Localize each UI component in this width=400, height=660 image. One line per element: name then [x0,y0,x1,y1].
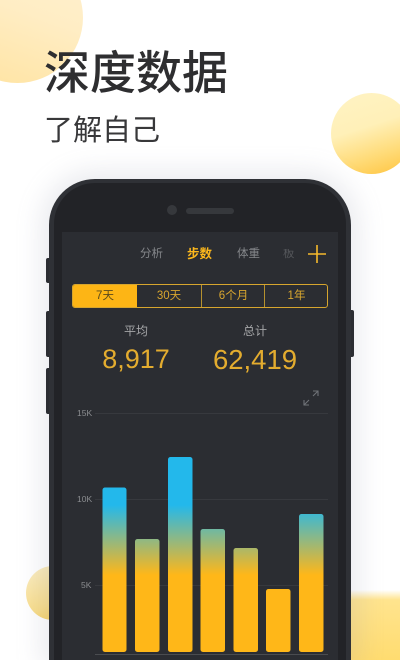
app screen [62,232,338,660]
nav tab: 步数 active: 步数 [187,247,212,261]
nav tab: 分析: 分析 [140,248,163,260]
stat value: total: 62,419 [213,344,297,375]
icon: plus [308,245,326,263]
bars [102,457,324,652]
phone front bezel [54,183,346,660]
speaker [186,208,234,214]
bar: day 1 [102,488,126,652]
stat label: 平均: 平均 [124,324,148,338]
stat value: average: 8,917 [102,344,170,374]
phone [46,179,354,660]
title: 深度数据 [44,47,228,99]
bar: day 7 [299,514,324,652]
side button: power [348,310,354,357]
period selector [72,284,328,308]
bar: day 6 [266,589,290,652]
axis labels: 15K [77,408,92,418]
option: 30天: 30天 [157,290,181,302]
side button: volume down [46,368,52,414]
option: 7天: 7天 [96,290,114,302]
axis labels: 10K [77,494,92,504]
subtitle: 了解自己 [44,115,160,147]
decorative circle: top left [0,0,83,83]
option: 1年: 1年 [288,290,305,302]
side button: mute [46,258,52,283]
bar: day 3 [168,457,192,652]
decorative circle: top right [331,93,400,174]
icon: expand [304,390,318,406]
axis labels: 5K [81,580,92,590]
decorative glow: lower right [340,590,400,660]
bar: day 5 [234,548,258,652]
nav tab: 体重: 体重 [237,248,260,260]
bar: day 4 [200,529,225,652]
phone body [49,179,351,660]
side button: volume up [46,311,52,357]
front camera [167,205,177,215]
stat label: 总计: 总计 [243,324,267,338]
option: 6个月: 6个月 [219,290,248,302]
option: 6个月 [201,285,265,307]
option: 7天 [73,285,137,307]
phone shadow [49,179,351,660]
option: 1年 [264,285,328,307]
axis labels [77,408,92,590]
decorative circle: lower left [26,566,80,620]
bar: day 2 [135,539,160,652]
